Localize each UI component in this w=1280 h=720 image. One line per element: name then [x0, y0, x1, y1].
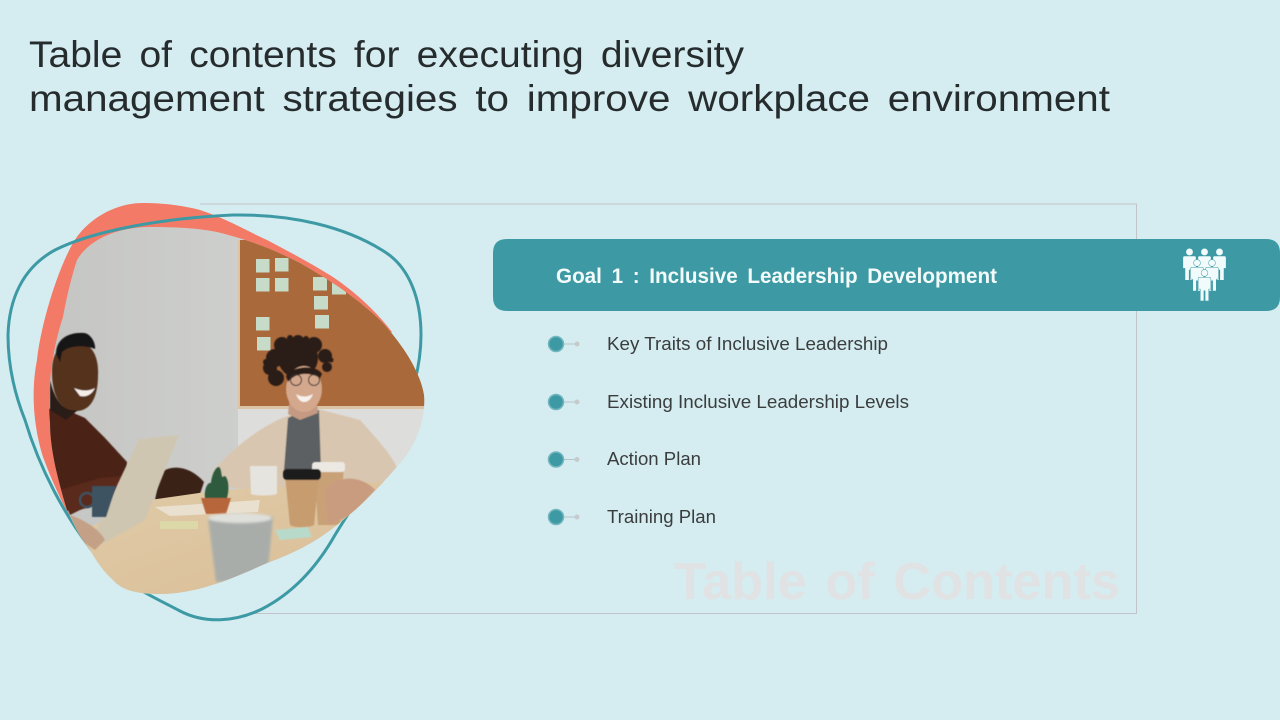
list item 4 — [548, 507, 716, 527]
title: Table of contents for executing diversity — [29, 34, 745, 75]
table — [78, 482, 384, 594]
icon: group of people — [1183, 249, 1226, 301]
blue mug — [80, 486, 116, 517]
laptop — [70, 435, 179, 550]
teal outline blob — [8, 215, 421, 620]
hand in foreground — [325, 479, 375, 525]
man in brown shirt — [49, 332, 205, 516]
list item 3: Action Plan — [607, 449, 701, 469]
watermark: Table of Contents: Table of Contents — [674, 553, 1120, 611]
image group: blobs and photo — [8, 203, 430, 620]
corkboard with notes — [238, 240, 430, 409]
list item 3 — [548, 449, 701, 469]
photo: meeting at table — [49, 227, 424, 594]
list item 2: Existing Inclusive Leadership Levels — [607, 392, 909, 412]
title: management strategies to improve workplace environment — [29, 78, 1111, 119]
grey mug in foreground — [208, 513, 273, 582]
title — [29, 34, 1111, 119]
cactus plant — [201, 467, 231, 514]
coral blob — [34, 203, 392, 553]
content frame — [200, 204, 1136, 614]
banner heading: Goal 1 : Inclusive Leadership Development — [556, 265, 997, 288]
curly hair — [263, 335, 334, 386]
white mug — [250, 466, 277, 496]
list item 1: Key Traits of Inclusive Leadership — [607, 334, 888, 354]
list item 4: Training Plan — [607, 507, 716, 527]
paper coffee cups — [283, 462, 345, 527]
woman in beige jacket — [212, 335, 398, 490]
goal banner — [493, 239, 1280, 311]
wall — [49, 227, 418, 594]
sticky tape holder — [275, 527, 312, 540]
